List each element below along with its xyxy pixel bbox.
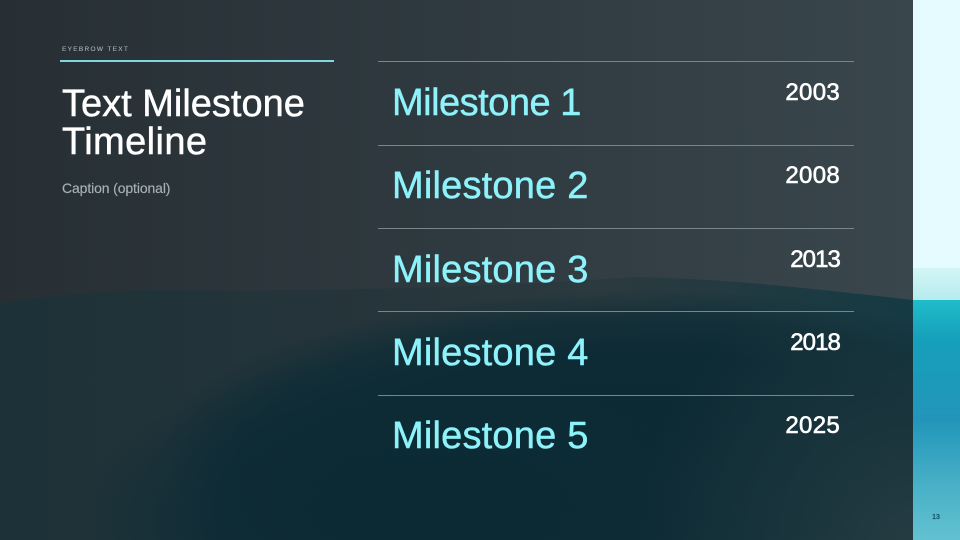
- right colour strip: [913, 0, 960, 540]
- milestone row 4: Milestone 4: [392, 332, 589, 374]
- milestone row 3: [378, 228, 854, 291]
- milestone row 3: 2013: [790, 246, 840, 273]
- page number: 13: [932, 514, 940, 521]
- milestone row 4: [378, 311, 854, 374]
- milestone row 4: 2018: [790, 329, 840, 356]
- accent rule under eyebrow: [60, 60, 334, 62]
- caption: Caption (optional): [62, 180, 170, 196]
- title: Timeline: [62, 121, 207, 163]
- milestone row 2: 2008: [785, 162, 840, 189]
- milestone timeline list: [378, 61, 854, 457]
- milestone row 2: Milestone 2: [392, 165, 589, 207]
- milestone row 2: [378, 145, 854, 207]
- milestone row 1: 2003: [785, 79, 840, 106]
- eyebrow text: EYEBROW TEXT: [62, 46, 129, 53]
- milestone row 1: [378, 61, 854, 124]
- milestone row 5: Milestone 5: [392, 415, 589, 457]
- milestone row 1: Milestone 1: [392, 82, 581, 124]
- milestone row 3: Milestone 3: [392, 249, 589, 291]
- title: [62, 83, 305, 163]
- milestone row 5: 2025: [785, 412, 840, 439]
- milestone row 5: [378, 395, 854, 457]
- title: Text Milestone: [62, 83, 305, 125]
